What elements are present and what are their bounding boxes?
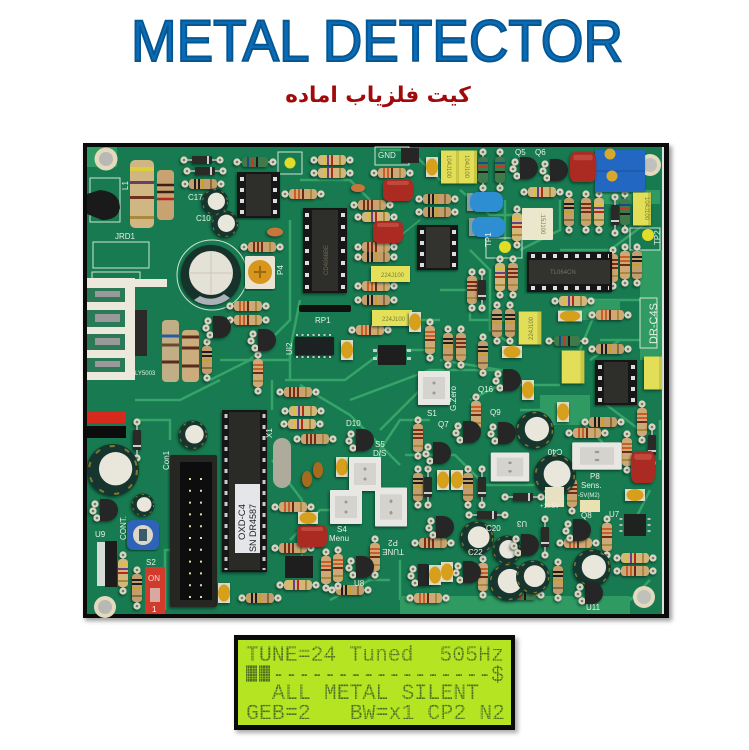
silkscreen labels: JRD1: [115, 232, 136, 241]
DIP switch S2: 1: [152, 605, 157, 614]
title: METAL DETECTOR: METAL DETECTOR: [131, 9, 623, 74]
capacitor value markings: 104J100: [643, 197, 649, 221]
silkscreen labels: S1: [427, 409, 437, 418]
blue trimmers: [595, 148, 645, 192]
silkscreen labels: -5V(M2): [578, 493, 600, 499]
silkscreen labels: P8: [590, 472, 600, 481]
yellow disc capacitors: [218, 157, 645, 603]
electrolytic capacitors: [87, 188, 611, 601]
silkscreen labels: [95, 148, 662, 612]
silkscreen labels: TP2: [653, 230, 662, 245]
silkscreen labels: Menu: [329, 534, 349, 543]
LCD display: [234, 635, 518, 733]
silkscreen labels: S4: [337, 525, 347, 534]
capacitor value markings: [381, 155, 649, 340]
LCD line 4: GEB=2 BW=x1 CP2 N2: [246, 701, 505, 726]
silkscreen labels: S5: [375, 440, 385, 449]
IC TL064 16-pin: TL064CN: [550, 270, 576, 276]
silkscreen labels: Q6: [535, 148, 546, 157]
white film capacitor: [522, 208, 553, 240]
crystal X1: [273, 438, 291, 488]
microcontroller OXD-C4: [222, 410, 267, 572]
trimmer CONT: [127, 520, 159, 550]
capacitor value markings: 224J100: [381, 273, 405, 279]
silkscreen labels: Q9: [490, 408, 501, 417]
power resistors: [157, 170, 199, 382]
trimmer potentiometer P4: [245, 256, 275, 289]
silkscreen labels: L1: [121, 181, 130, 190]
IC 8-pin right: [595, 360, 637, 405]
IC TL072 8-pin: [417, 225, 458, 270]
subtitle: Persian kit title: كيت فلزياب اماده: [285, 83, 471, 108]
IC U1 8-pin socket: [237, 172, 280, 218]
silkscreen labels: P4: [276, 265, 285, 275]
DIP switch S2: [145, 567, 165, 614]
silkscreen labels: RP1: [315, 316, 331, 325]
SMD IC UI2: [295, 335, 334, 357]
resistors: [118, 148, 657, 610]
IC TL064 16-pin: [527, 252, 612, 292]
microcontroller OXD-C4: OXD-C4: [237, 504, 248, 540]
mounting holes: [94, 148, 661, 618]
LCD line 1: TUNE=24 Tuned 505Hz: [246, 643, 504, 668]
inductor L1: [130, 160, 154, 228]
silkscreen labels: Q5: [515, 148, 526, 157]
white heatsink connector: [87, 278, 167, 380]
silkscreen labels: GND: [378, 151, 396, 160]
DIP switch S2: ON: [148, 574, 160, 583]
capacitor value markings: 104J100: [445, 155, 451, 179]
diodes: [133, 156, 656, 559]
silkscreen labels: P2: [388, 538, 398, 547]
silkscreen labels: +10.5V: [540, 504, 559, 510]
board: light copper traces and fills: [135, 150, 660, 610]
IC CD4066 14-pin: [303, 208, 347, 293]
board: lighter ground fill patches: [87, 147, 662, 614]
silkscreen labels: G.Zero: [449, 386, 458, 411]
panel: circuit board photo: [83, 143, 672, 621]
silkscreen labels: Sens.: [581, 481, 601, 490]
silkscreen labels: UI2: [285, 342, 294, 355]
LCD line 3: ALL METAL SILENT: [272, 681, 479, 706]
silkscreen labels: U8: [354, 579, 365, 588]
silkscreen labels: C40: [547, 447, 562, 456]
ribbon header Con1: [170, 455, 217, 607]
silkscreen labels: C17: [188, 193, 203, 202]
silkscreen labels: U3: [516, 519, 527, 528]
silkscreen labels: C22: [468, 548, 483, 557]
silkscreen labels: LY5003: [135, 371, 156, 377]
silkscreen labels: U7: [609, 510, 620, 519]
capacitor value markings: .15J100: [539, 213, 545, 235]
silkscreen labels: Con1: [162, 450, 171, 470]
LCD line 2 level bar: -----------------$: [272, 663, 504, 688]
silkscreen labels: CONT.: [119, 516, 128, 540]
silkscreen labels: Q8: [581, 511, 592, 520]
silkscreen labels: U11: [586, 603, 601, 612]
silkscreen labels: D10: [346, 419, 361, 428]
power wires: [87, 412, 126, 438]
silkscreen labels: C10: [196, 214, 211, 223]
silkscreen labels: U9: [95, 530, 106, 539]
silkscreen labels: Q7: [438, 420, 449, 429]
silk boxes: [90, 147, 660, 348]
black coil cable: [87, 190, 120, 220]
yellow film capacitors: [371, 150, 662, 390]
IC CD4066 14-pin: CD4066BE: [324, 245, 330, 275]
silkscreen labels: TP1: [484, 232, 493, 247]
silkscreen labels: C20: [486, 524, 501, 533]
large capacitor: [181, 245, 241, 305]
test points: [284, 158, 654, 253]
LCD dot-matrix grid overlay: [238, 640, 511, 725]
white pin connectors: [330, 371, 622, 527]
capacitor value markings: 224J100: [529, 316, 535, 340]
resistor network RP1: [299, 305, 351, 312]
regulator U9: [97, 541, 117, 587]
capacitor value markings: 224J100: [382, 317, 406, 323]
silkscreen labels: TUNE: [382, 547, 404, 556]
red box capacitors: [297, 152, 655, 547]
blue disc capacitors: [467, 192, 505, 237]
capacitor value markings: 104J100: [463, 155, 469, 179]
optocouplers and SMD chips: [285, 148, 649, 578]
silkscreen labels: DR-C4S: [648, 303, 660, 344]
silkscreen labels: Q16: [478, 385, 494, 394]
silkscreen labels: X1: [265, 428, 274, 438]
silkscreen labels: S2: [146, 558, 156, 567]
microcontroller OXD-C4: SN DR4587: [248, 504, 258, 552]
transistors: [89, 157, 603, 605]
silkscreen labels: D/S: [373, 449, 386, 458]
